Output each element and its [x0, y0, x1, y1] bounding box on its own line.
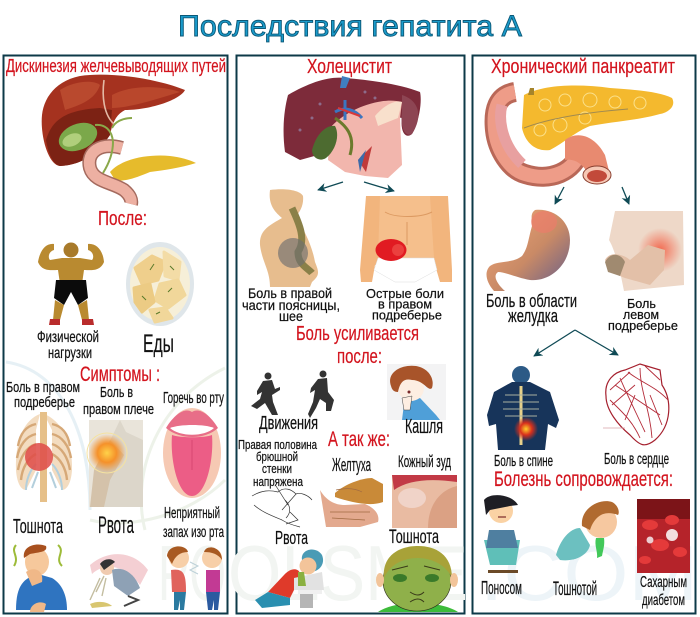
label: acute pain: в правом — [378, 296, 432, 312]
label: skin itch: Кожный зуд — [398, 452, 451, 471]
illustration: ribcage — [16, 412, 72, 502]
watermark letters: OLSME — [228, 529, 468, 617]
watermark letters: PO — [158, 529, 226, 617]
illustration: abdomen with pain — [360, 196, 452, 282]
heading: cholecystitis: Холецистит — [307, 56, 392, 78]
label: abdominal wall tension: Правая половина — [238, 437, 318, 452]
label: acute pain: подреберье — [372, 308, 442, 322]
label: nausea: Тошнота — [389, 527, 439, 548]
label: stomach pain — [486, 291, 577, 326]
illustration: blood cells — [637, 499, 690, 573]
label: vomiting: Рвота — [98, 512, 134, 539]
illustration: stomach — [487, 210, 570, 291]
icon: green sick face — [376, 546, 458, 612]
illustration: shoulder pain — [87, 420, 143, 507]
label: lumbar pain: Боль в правой — [248, 286, 332, 301]
label: abdominal wall tension: стенки — [262, 461, 292, 476]
illustration: back silhouette — [260, 189, 318, 287]
illustration: pancreas and duodenum — [495, 86, 673, 184]
label: vomiting: Рвота — [275, 528, 309, 548]
label: acute pain — [366, 286, 444, 322]
illustration: liver and pancreas — [42, 75, 196, 204]
watermark arcs — [6, 362, 225, 530]
label: right hypochondrium pain: Боль в правом — [6, 379, 80, 396]
label: lumbar pain: шее — [279, 309, 303, 324]
label: right shoulder pain — [83, 384, 154, 418]
icon: coughing girl — [387, 364, 446, 420]
illustration: tongue — [163, 408, 221, 498]
label: diabetes — [640, 574, 687, 609]
heading: also: А так же: — [328, 428, 390, 451]
illustration: liver with gallbladder — [284, 76, 421, 178]
label: bad breath — [163, 505, 224, 541]
heading: pain increases — [296, 323, 419, 368]
label: physical exertion — [37, 329, 99, 362]
heading: dyskinesia: Дискинезия желчевыводящих путей — [6, 56, 226, 76]
label: left side pain: Боль — [627, 296, 656, 311]
icon: boy on toilet — [484, 495, 520, 573]
label: bitter taste: Горечь во рту — [163, 390, 224, 407]
label: bad breath: Неприятный — [164, 505, 220, 522]
label: back pain: Боль в спине — [494, 453, 553, 470]
heading: pain increases: Боль усиливается — [296, 323, 419, 345]
label: movements: Движения — [259, 413, 318, 433]
label: nausea: Тошнота — [13, 516, 64, 538]
icon: muscular man — [38, 242, 104, 325]
icon: man with nausea — [14, 544, 67, 612]
panel: dyskinesia — [4, 56, 228, 617]
label: lumbar pain: части поясницы, — [242, 298, 340, 313]
panel: cholecystitis — [228, 56, 468, 617]
panel: chronic pancreatitis — [472, 56, 698, 617]
label: food: Еды — [143, 330, 174, 358]
illustration: line drawing — [252, 486, 312, 527]
icon: two people — [167, 546, 222, 610]
label: jaundice: Желтуха — [332, 455, 372, 475]
arrow: to heart pain — [575, 330, 618, 355]
illustration: anatomical heart — [603, 364, 669, 445]
label: physical exertion: нагрузки — [48, 345, 92, 362]
label: acute pain: Острые боли — [366, 286, 444, 301]
label: diarrhea: Поносом — [481, 578, 522, 598]
heading: pain increases: после: — [337, 346, 382, 368]
label: right shoulder pain: правом плече — [83, 401, 154, 418]
arrow: to back — [318, 182, 343, 190]
heading: symptoms: Симптомы : — [80, 363, 160, 386]
arrow: to abdomen — [364, 182, 394, 191]
label: bad breath: запах изо рта — [163, 524, 224, 541]
label: nausea: Тошнотой — [553, 579, 597, 600]
label: left side pain — [608, 296, 678, 333]
label: stomach pain: желудка — [508, 306, 559, 326]
label: stomach pain: Боль в области — [486, 291, 577, 311]
label: right hypochondrium pain: подреберье — [14, 394, 75, 411]
label: physical exertion: Физической — [37, 329, 99, 346]
label: left side pain: левом — [623, 307, 659, 322]
icon: boy vomiting into toilet — [255, 550, 324, 608]
label: abdominal wall tension: брюшной — [256, 449, 298, 464]
label: abdominal wall tension — [238, 437, 318, 489]
illustration: glowing back — [487, 366, 559, 450]
arrow: to stomach — [555, 187, 564, 204]
icon: boy vomiting — [556, 501, 619, 560]
label: right shoulder pain: Боль в — [100, 384, 133, 401]
arrow: to back pain — [534, 330, 575, 356]
label: right hypochondrium pain — [6, 379, 80, 411]
title: Последствия гепатита А — [178, 10, 522, 43]
illustration: skin itching — [392, 475, 457, 528]
watermark domain: .COM — [480, 529, 698, 617]
label: abdominal wall tension: напряжена — [253, 474, 304, 489]
label: left side pain: подреберье — [608, 318, 678, 333]
arrow: to side — [622, 187, 629, 204]
icon: plate of food — [126, 242, 194, 326]
label: after: После: — [98, 208, 147, 230]
illustration: torso with hand — [605, 211, 684, 291]
illustration: yellow hands — [320, 478, 383, 527]
label: lumbar pain — [242, 286, 340, 324]
label: cough: Кашля — [405, 416, 443, 438]
icon: runners — [251, 370, 334, 418]
icon: man vomiting — [90, 554, 148, 608]
